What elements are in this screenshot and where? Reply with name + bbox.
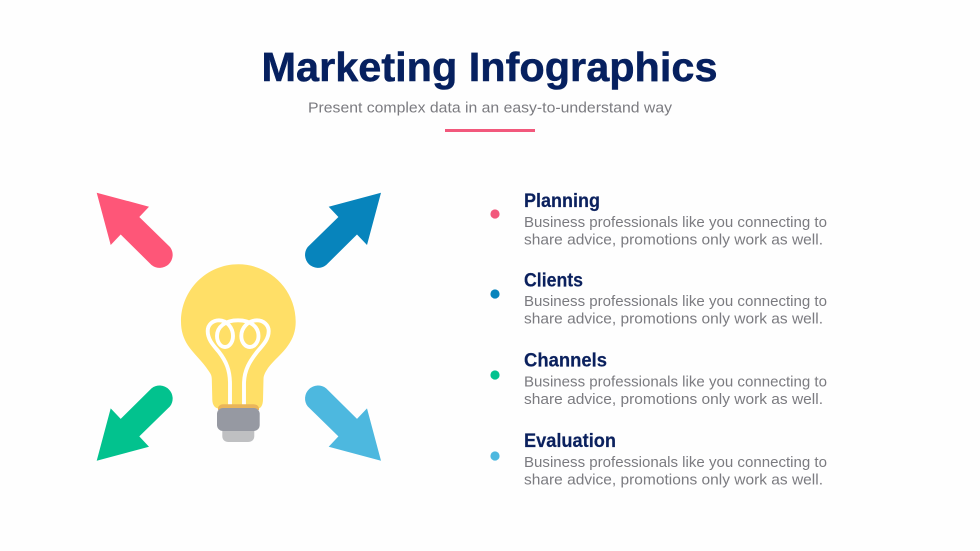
description: Business professionals like you connecting to <box>524 214 827 231</box>
arrow: green down-left <box>97 386 173 461</box>
description: share advice, promotions only work as well. <box>524 310 823 328</box>
title: Marketing Infographics <box>262 44 718 90</box>
description: share advice, promotions only work as well. <box>524 232 823 248</box>
filament <box>208 320 269 408</box>
description: share advice, promotions only work as well. <box>524 391 823 408</box>
title underline <box>445 129 535 132</box>
description: Business professionals like you connecting to <box>524 454 827 471</box>
dot <box>490 451 500 461</box>
item: Channels <box>490 350 827 408</box>
item: Planning <box>490 191 827 248</box>
dot <box>490 370 500 380</box>
grey screw base <box>217 408 260 431</box>
description: share advice, promotions only work as well. <box>524 472 823 488</box>
dot <box>490 289 500 299</box>
arrow: light blue down-right <box>305 386 381 461</box>
icon: light bulb <box>181 264 296 442</box>
arrow: pink up-left <box>97 193 173 268</box>
dot <box>490 209 500 219</box>
item: Evaluation <box>490 431 827 488</box>
light grey cap <box>222 431 254 442</box>
bulb glass <box>181 264 296 408</box>
heading: Planning <box>524 191 600 212</box>
subtitle: Present complex data in an easy-to-understand way <box>308 100 673 116</box>
description: Business professionals like you connecting to <box>524 293 827 310</box>
heading: Channels <box>524 350 607 372</box>
heading: Evaluation <box>524 431 616 452</box>
heading: Clients <box>524 270 583 292</box>
description: Business professionals like you connecting to <box>524 374 827 390</box>
item: Clients <box>490 270 827 328</box>
bulb neck shadow <box>218 404 259 410</box>
arrow: blue up-right <box>305 193 381 268</box>
